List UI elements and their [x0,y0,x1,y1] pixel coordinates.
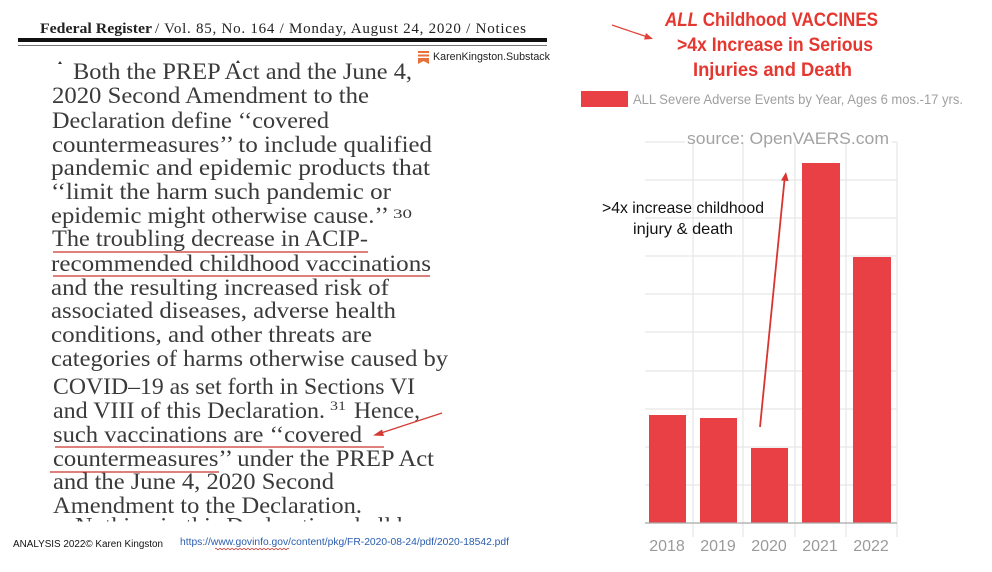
footer: source link: https://www.govinfo.gov/content/pkg/FR-2020-08-24/pdf/2020-18542.pdf [180,537,509,548]
document body text: COVID–19 as set forth in Sections VI [53,374,415,399]
document body text: conditions, and other threats are [51,322,372,347]
bars [649,163,891,523]
chart source label: source: OpenVAERS.com [687,129,889,148]
document body text: Nothing in this Declaration shall be [75,514,420,538]
document header: Federal Register [40,21,152,37]
document header: / Vol. 85, No. 164 / Monday, August 24, 2020 / Notices [155,21,526,37]
heading: ALL Childhood Vaccines: >4x Increase in Serious [677,35,873,56]
arrow to heading [612,25,653,40]
year labels: 2020 [751,538,787,555]
annotation: 4x increase: >4x increase childhood [602,200,764,217]
document body text: epidemic might otherwise cause.’’ [51,203,389,228]
document body text: 2020 Second Amendment to the [52,83,369,108]
document body text: countermeasures’’ under the PREP Act [53,446,435,471]
year labels: 2019 [700,538,736,555]
footer: copyright: ANALYSIS 2022© Karen Kingston [13,539,163,550]
document body text: recommended childhood vaccinations [51,251,431,276]
bar chart [645,129,897,555]
red underlines [50,252,430,472]
document body text: pandemic and epidemic products that [51,155,431,180]
document body text: Amendment to the Declaration. [53,493,362,518]
year labels [649,538,889,555]
watermark: KarenKingston.Substack: KarenKingston.Substack [433,51,550,63]
document body text: and VIII of this Declaration. [53,398,325,423]
annotation: 4x increase: injury & death [633,221,733,238]
document body text: ‘‘limit the harm such pandemic or [51,179,391,204]
annotation: 4x increase [602,200,764,238]
heading: ALL Childhood Vaccines: Injuries and Death [693,60,852,81]
document body text: Declaration define ‘‘covered [52,108,330,133]
document body text: The troubling decrease in ACIP- [52,226,368,251]
document body text: categories of harms otherwise caused by [51,346,449,371]
chart legend: ALL Severe Adverse Events by Year, Ages 6 mos.-17 yrs. [633,91,963,107]
arrow to covered countermeasures [373,413,442,436]
document header [18,21,547,46]
heading: ALL Childhood Vaccines [664,10,878,81]
document body text: and the resulting increased risk of [51,275,389,300]
document body text: Both the PREP Act and the June 4, [73,59,412,84]
document body text: and the June 4, 2020 Second [53,469,335,494]
document body text: Hence, [354,398,420,423]
document body text: countermeasures’’ to include qualified [52,132,433,157]
document body text: 30 [393,206,412,221]
year labels: 2022 [853,538,889,555]
document body text: 31 [330,398,346,413]
panel: Federal Register excerpt [18,21,550,538]
heading: ALL Childhood Vaccines: ALL Childhood VACCINES [664,10,878,31]
document body text: such vaccinations are ‘‘covered [53,422,363,447]
document body text: associated diseases, adverse health [51,298,397,323]
year labels: 2018 [649,538,685,555]
year labels: 2021 [802,538,838,555]
arrow: rise from 2020 to 2021 [760,172,788,427]
document body text [51,59,449,538]
